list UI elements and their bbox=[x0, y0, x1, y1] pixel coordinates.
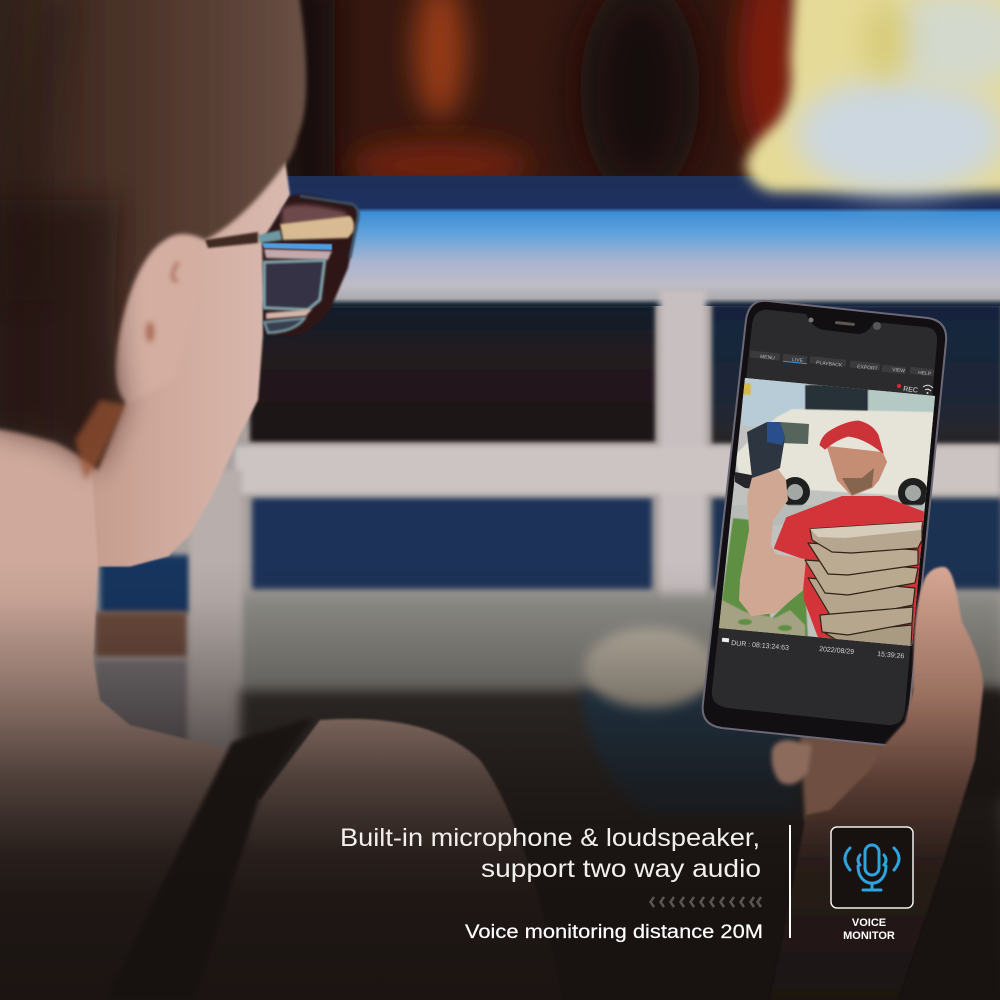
phone body bbox=[703, 301, 946, 745]
status bar: DUR : 08:13:24:63 bbox=[731, 640, 789, 652]
television picture bbox=[284, 0, 803, 176]
screen bbox=[712, 310, 937, 725]
bright highlight on television bbox=[745, 0, 1000, 193]
phone app menu: LIVE bbox=[792, 357, 804, 364]
icon box bbox=[831, 827, 913, 908]
face bbox=[90, 160, 290, 566]
distance note: Voice monitoring distance 20M bbox=[465, 922, 763, 943]
reflected lights band bbox=[280, 216, 354, 240]
phone app menu: PLAYBACK bbox=[816, 360, 843, 369]
red shirt bbox=[775, 497, 925, 640]
ear bbox=[116, 234, 203, 405]
glasses bbox=[205, 194, 358, 336]
hand holding phone bbox=[770, 567, 983, 1000]
recording indicator: REC bbox=[903, 386, 918, 395]
dark lens bbox=[264, 260, 325, 310]
blurred table bbox=[240, 690, 1000, 1000]
outer frame bbox=[262, 194, 358, 336]
upper lens bbox=[282, 205, 350, 225]
shoulder strap bbox=[105, 718, 312, 1000]
badge label: VOICE bbox=[852, 917, 886, 929]
status bar: 15:39:26 bbox=[877, 651, 905, 660]
blue and pink lens strips bbox=[262, 243, 332, 250]
feature caption bbox=[340, 824, 763, 943]
lawn bbox=[719, 504, 925, 636]
blurred bowl of food bbox=[580, 628, 800, 815]
man arm and hand bbox=[740, 460, 805, 615]
phone app menu: HELP bbox=[918, 370, 932, 377]
voice monitor badge: MONITOR bbox=[843, 930, 895, 942]
palm and finger behind phone bbox=[772, 735, 890, 830]
divider bbox=[789, 825, 791, 938]
voice monitor badge bbox=[831, 827, 913, 942]
dark fade over lower image bbox=[0, 560, 1000, 1000]
phone app menu: EXPORT bbox=[857, 364, 878, 372]
red cap bbox=[820, 421, 883, 453]
headline bbox=[340, 824, 761, 883]
person bbox=[0, 0, 565, 1000]
background: blurred living room bbox=[92, 0, 1000, 856]
phone app menu bbox=[750, 350, 934, 377]
pizza boxes bbox=[805, 522, 922, 648]
camera notch bbox=[808, 318, 881, 330]
status bar: 2022/08/29 bbox=[819, 646, 854, 656]
phone app menu: MENU bbox=[760, 354, 775, 362]
head bbox=[828, 447, 886, 495]
white van bbox=[735, 409, 935, 508]
card reader held up bbox=[747, 422, 785, 478]
headline: support two way audio bbox=[481, 855, 761, 883]
hair bbox=[0, 0, 306, 480]
status bar bbox=[722, 638, 905, 660]
decorative chevrons bbox=[650, 897, 761, 907]
live camera photo: delivery man bbox=[715, 375, 940, 650]
phone app menu: VIEW bbox=[892, 367, 905, 374]
building behind bbox=[742, 376, 938, 426]
icon: microphone with sound waves bbox=[845, 845, 899, 890]
blurred shelving panels and frame bbox=[95, 290, 1000, 755]
headline: Built-in microphone & loudspeaker, bbox=[340, 824, 760, 852]
neck and shoulder bbox=[0, 380, 565, 1000]
smartphone bbox=[703, 301, 946, 745]
temple arm bbox=[205, 232, 258, 248]
television lower bezel bbox=[270, 176, 1000, 306]
recording indicator bbox=[897, 384, 933, 395]
